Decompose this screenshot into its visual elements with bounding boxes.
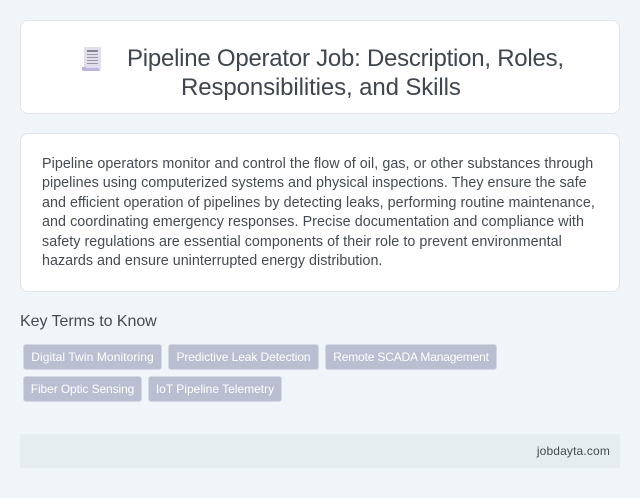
text block: description: Pipeline operators monitor and control the flow of oil, gas, or other substances through	[42, 156, 593, 172]
text block: description: safety regulations are essential components of their role to prevent environmental	[42, 234, 562, 250]
title: Responsibilities, and Skills	[181, 74, 461, 101]
tag: remote scada management: Remote SCADA Management	[333, 350, 489, 364]
footer text: jobdayta.com	[537, 444, 610, 458]
tag: predictive leak detection: Predictive Leak Detection	[176, 350, 311, 364]
text block: description: and coordinating emergency responses. Precise documentation and compliance with	[42, 214, 584, 230]
tag: fiber optic sensing	[23, 376, 142, 402]
tag: iot pipeline telemetry: IoT Pipeline Telemetry	[156, 382, 274, 396]
text block: description: and efficient operation of pipelines by detecting leaks, performing routine maintenance,	[42, 194, 595, 210]
title: Pipeline Operator Job: Description, Roles,	[127, 45, 564, 72]
title	[127, 45, 564, 101]
tag: predictive leak detection	[168, 344, 319, 370]
footer bar	[20, 434, 620, 468]
tag: fiber optic sensing: Fiber Optic Sensing	[31, 382, 134, 396]
panel: title card	[20, 20, 620, 114]
icon: document	[82, 47, 101, 71]
tag: remote scada management	[325, 344, 497, 370]
tag: iot pipeline telemetry	[148, 376, 282, 402]
tag: digital twin monitoring: Digital Twin Monitoring	[31, 350, 154, 364]
tag: digital twin monitoring	[23, 344, 162, 370]
text block: description: pipelines using computerized systems and physical inspections. They ensure the safe	[42, 175, 587, 191]
text block: description	[42, 156, 595, 269]
panel: description	[20, 133, 620, 292]
heading: key terms: Key Terms to Know	[20, 313, 157, 330]
text block: description: hazards and ensure uninterrupted energy distribution.	[42, 253, 382, 269]
